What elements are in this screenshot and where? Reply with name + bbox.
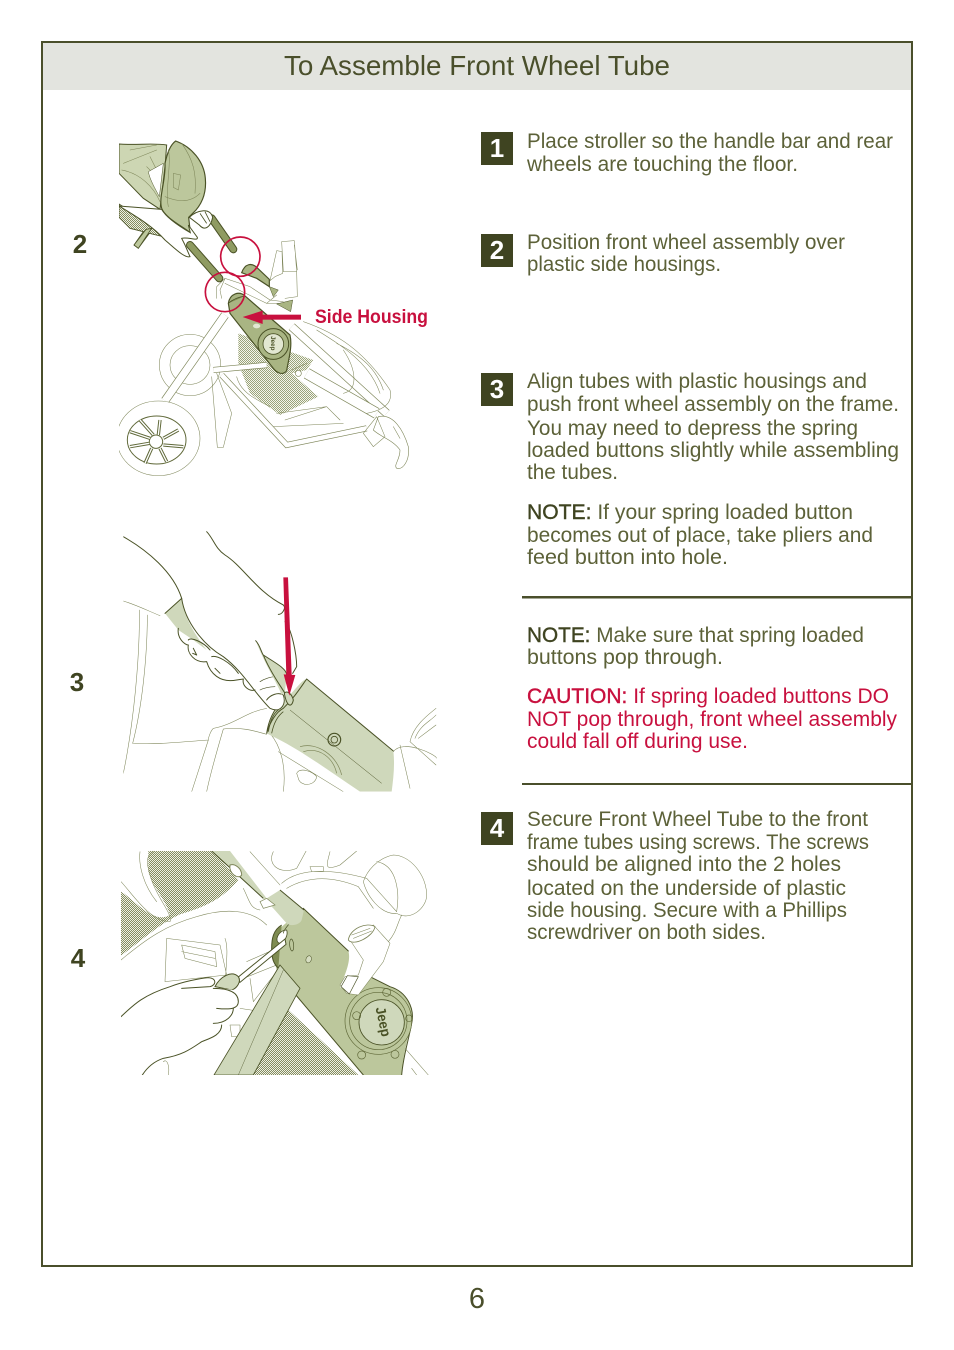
step 3 text: Align tubes with plastic housings and	[527, 370, 867, 393]
body lines	[123, 601, 437, 792]
illustration: pushing spring button	[123, 532, 437, 792]
left sleeve	[165, 598, 207, 650]
number badge 2	[481, 234, 513, 267]
thumb sleeve	[256, 641, 287, 695]
step 4 text: frame tubes using screws. The screws	[527, 831, 869, 854]
note: spring button: NOTE: If your spring loaded button	[527, 501, 853, 524]
red alignment circles	[205, 237, 260, 312]
step 3 text: the tubes.	[527, 461, 618, 484]
number badge 4: 4	[490, 813, 505, 843]
seat back	[119, 144, 167, 209]
tubes	[212, 218, 233, 249]
step 4 text: should be aligned into the 2 holes	[527, 853, 841, 876]
step 3 text: push front wheel assembly on the frame.	[527, 393, 899, 416]
caution	[527, 685, 897, 753]
number badge 1: 1	[490, 133, 504, 163]
step 4 text: side housing. Secure with a Phillips	[527, 899, 847, 922]
illustration: securing with screwdriver	[121, 850, 428, 1075]
screwdriver	[237, 939, 286, 982]
step 2 text: Position front wheel assembly over	[527, 231, 845, 254]
step 2	[481, 231, 845, 276]
caution: CAUTION: If spring loaded buttons DO	[527, 685, 889, 708]
side housing arrow	[243, 311, 301, 324]
seat and footrest lines	[237, 322, 391, 427]
number badge 4	[481, 812, 513, 845]
hands	[119, 206, 197, 257]
caution: could fall off during use.	[527, 730, 748, 753]
step 2 text	[527, 231, 845, 276]
step number label 3: 3	[70, 667, 84, 697]
step 2 text: plastic side housings.	[527, 253, 721, 276]
footrest wheel clip	[373, 416, 409, 469]
number badge 2: 2	[490, 235, 504, 265]
step 1 text: wheels are touching the floor.	[526, 153, 798, 176]
step 3 text	[527, 370, 899, 484]
upper tube	[212, 851, 304, 925]
front side housing	[228, 293, 291, 373]
frame near circles	[217, 278, 292, 303]
mesh seat	[121, 851, 238, 956]
step number label 4: 4	[71, 943, 86, 973]
step 4 text: screwdriver on both sides.	[527, 921, 766, 944]
step number label 2: 2	[73, 229, 87, 259]
handlebar bracket	[270, 241, 297, 298]
screw button	[284, 692, 293, 705]
caution: NOT pop through, front wheel assembly	[527, 708, 897, 731]
front wheel	[117, 401, 200, 476]
note: spring button: feed button into hole.	[527, 546, 728, 569]
step 1	[481, 130, 893, 176]
note: buttons pop through: NOTE: Make sure that spring loaded	[527, 624, 864, 647]
step 3 text: loaded buttons slightly while assembling	[527, 439, 899, 462]
mesh bottom	[253, 1008, 358, 1075]
upper side housing	[242, 265, 269, 287]
title bar	[43, 43, 911, 90]
number badge 3: 3	[490, 374, 504, 404]
step 3	[481, 370, 899, 569]
down arrow	[283, 577, 295, 696]
number badge 1	[481, 132, 513, 165]
step 4 text: located on the underside of plastic	[527, 877, 846, 900]
back wheel	[159, 334, 221, 396]
side housing label: Side Housing	[315, 307, 428, 328]
main side housing	[274, 908, 412, 1075]
hand	[214, 987, 233, 990]
note: spring button	[527, 501, 873, 569]
step 3 text: You may need to depress the spring	[527, 417, 858, 440]
number badge 3	[481, 373, 513, 406]
page number: 6	[469, 1283, 485, 1315]
tube	[267, 679, 394, 792]
hand	[274, 701, 284, 710]
note: spring button: becomes out of place, take pliers and	[527, 524, 873, 547]
step 4 text: Secure Front Wheel Tube to the front	[527, 808, 868, 831]
knob and clip	[340, 925, 390, 995]
note: buttons pop through: buttons pop through.	[527, 646, 723, 669]
second hand	[207, 532, 297, 673]
hub	[345, 988, 412, 1054]
note: buttons pop through	[527, 624, 864, 669]
background line work	[121, 850, 428, 1075]
mesh basket	[238, 333, 318, 415]
illustration: stroller with side housing	[117, 141, 409, 476]
title bar: To Assemble Front Wheel Tube	[284, 50, 670, 81]
illustration: stroller with side housing: Jeep	[269, 336, 276, 351]
illustration: securing with screwdriver: Jeep	[373, 1005, 395, 1038]
lower tube	[214, 965, 300, 1075]
step 4	[481, 808, 869, 944]
canopy	[161, 141, 206, 233]
step 4 text	[527, 808, 869, 944]
step 1 text	[526, 130, 893, 176]
step 1 text: Place stroller so the handle bar and rear	[527, 130, 893, 153]
mesh basket top	[119, 204, 163, 248]
stroller frame tubes	[165, 315, 387, 447]
